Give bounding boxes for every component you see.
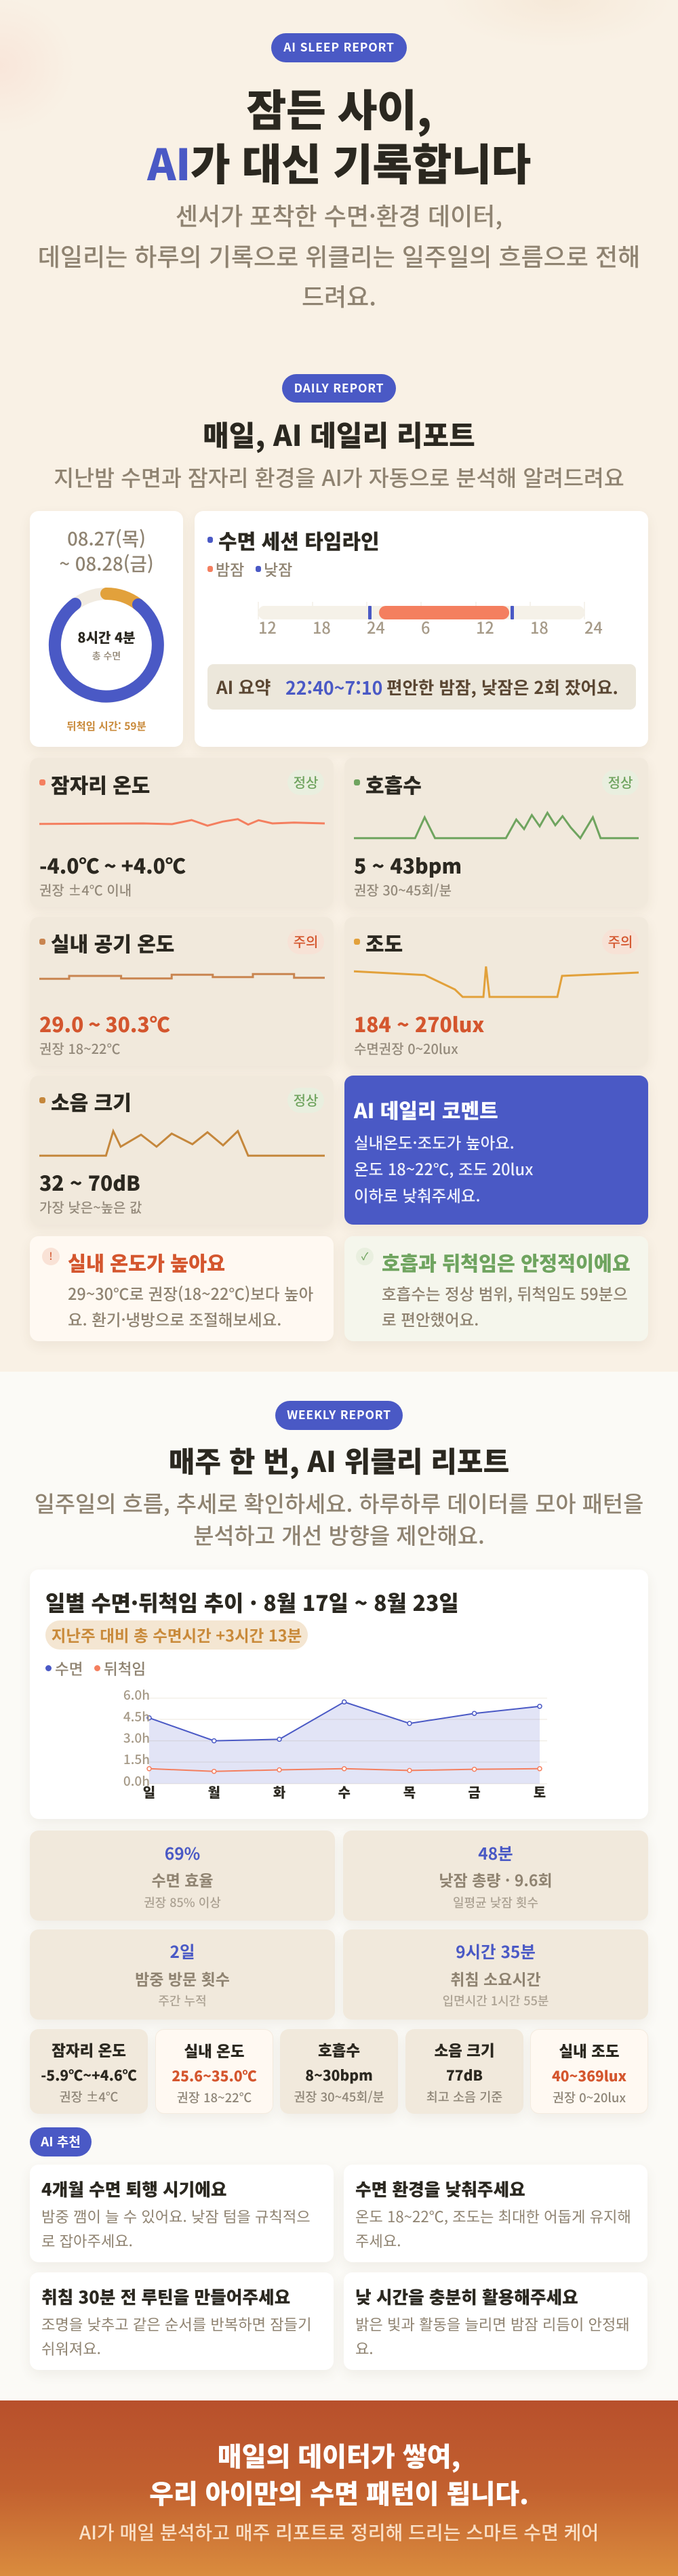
status chip — [287, 929, 324, 954]
badge: daily report: DAILY REPORT — [294, 380, 384, 396]
footer title — [149, 2436, 529, 2512]
status chip — [287, 1088, 324, 1113]
stat card: time to fall asleep: 9시간 35분 — [456, 1940, 536, 1963]
stat card: night visits — [30, 1929, 335, 2020]
summary: respiration: 호흡수 — [318, 2039, 360, 2061]
comment text: 이하로 낮춰주세요. — [354, 1183, 481, 1206]
subtitle: 드려요. — [302, 278, 376, 313]
summary: indoor temperature: 25.6~35.0℃ — [172, 2066, 257, 2086]
line chart: 4.5h — [123, 1707, 150, 1725]
summary: bed temperature: 권장 ±4℃ — [60, 2088, 118, 2106]
timeline chart: 12 — [258, 615, 277, 638]
stat card: time to fall asleep: 취침 소요시간 — [450, 1967, 541, 1990]
line chart: 금 — [468, 1782, 481, 1801]
legend: 낮잠 — [264, 557, 292, 580]
status chip: 주의 — [608, 931, 633, 951]
line chart: 월 — [207, 1782, 220, 1801]
status chip: 정상 — [294, 1090, 318, 1109]
callout body: 요. 환기·냉방으로 조절해보세요. — [68, 1307, 281, 1330]
date range: 08.27(목) — [67, 524, 146, 551]
recommendation: lower environment — [344, 2165, 647, 2262]
status chip: 정상 — [294, 772, 318, 792]
donut chart — [49, 588, 164, 703]
stat card: total naps: 일평균 낮잠 횟수 — [453, 1894, 538, 1911]
timeline chart: 24 — [367, 615, 385, 638]
stat card: sleep efficiency — [30, 1831, 335, 1921]
title: 잠든 사이, — [246, 77, 432, 139]
callout title: 실내 온도가 높아요 — [68, 1248, 225, 1277]
card title: 소음 크기 — [51, 1086, 132, 1116]
weekly report description: 분석하고 개선 방향을 제안해요. — [193, 1518, 485, 1551]
callout: room temperature high — [30, 1236, 334, 1341]
summary: indoor illuminance: 실내 조도 — [559, 2040, 620, 2062]
icon: check — [356, 1248, 374, 1265]
recommendation: sleep regression: 4개월 수면 퇴행 시기에요 — [41, 2176, 227, 2201]
sparkline — [39, 1128, 325, 1157]
badge: weekly report: WEEKLY REPORT — [287, 1406, 391, 1423]
legend — [45, 1658, 146, 1679]
heading: daily report: 매일, AI 데일리 리포트 — [203, 413, 475, 455]
AI summary — [207, 664, 636, 710]
recommendation: bedtime routine: 쉬워져요. — [41, 2337, 101, 2359]
sparkline — [39, 973, 325, 980]
subtitle: 센서가 포착한 수면·환경 데이터, — [176, 197, 502, 232]
footer title: 매일의 데이터가 쌓여, — [218, 2436, 460, 2474]
panel: daily sleep trend chart — [30, 1570, 648, 1819]
stat card: night visits: 밤중 방문 횟수 — [135, 1967, 230, 1990]
line chart: 3.0h — [123, 1728, 150, 1747]
stat card: sleep efficiency: 수면 효율 — [151, 1868, 214, 1891]
panel: respiration — [344, 758, 648, 907]
line chart: 토 — [534, 1782, 546, 1801]
status chip — [287, 770, 324, 795]
subtitle: 데일리는 하루의 기록으로 위클리는 일주일의 흐름으로 전해 — [38, 237, 640, 272]
card title: 호흡수 — [365, 769, 422, 799]
summary: indoor temperature: 권장 18~22℃ — [177, 2089, 252, 2106]
heading: weekly report: 매주 한 번, AI 위클리 리포트 — [169, 1439, 509, 1481]
line chart — [123, 1688, 547, 1801]
callout body: 29~30℃로 권장(18~22℃)보다 높아 — [68, 1282, 313, 1305]
marker — [354, 779, 360, 785]
icon: check: ✓ — [361, 1249, 368, 1263]
panel: footer — [0, 2400, 678, 2576]
summary: noise — [405, 2029, 523, 2114]
line chart: 화 — [273, 1782, 285, 1801]
recommendation: daytime: 밝은 빛과 활동을 늘리면 밤잠 리듬이 안정돼 — [355, 2313, 630, 2335]
card title: 실내 공기 온도 — [51, 928, 174, 958]
stat card: night visits: 2일 — [170, 1940, 195, 1963]
card title: 조도 — [365, 928, 403, 958]
panel: indoor air temperature — [30, 917, 334, 1066]
callout body: 호흡수는 정상 범위, 뒤척임도 59분으 — [382, 1282, 628, 1305]
timeline chart: 24 — [584, 615, 603, 638]
recommendation: lower environment: 온도 18~22℃, 조도는 최대한 어둡게 유지해 — [355, 2205, 631, 2227]
summary: indoor illuminance: 권장 0~20lux — [553, 2089, 626, 2106]
donut chart: 총 수면 — [92, 649, 121, 663]
recommendation: daytime: 낮 시간을 충분히 활용해주세요 — [355, 2284, 578, 2309]
panel: AI daily comment — [344, 1076, 648, 1225]
sparkline — [39, 818, 325, 827]
legend: 밤잠 — [216, 557, 244, 580]
recommendation: bedtime routine: 취침 30분 전 루틴을 만들어주세요 — [41, 2284, 290, 2309]
line chart: 0.0h — [123, 1772, 150, 1790]
summary: indoor illuminance — [530, 2029, 648, 2114]
comment text: 온도 18~22℃, 조도 20lux — [354, 1157, 533, 1180]
recommendation: 권장 18~22℃ — [39, 1038, 120, 1058]
footer subtitle: AI가 매일 분석하고 매주 리포트로 정리해 드리는 스마트 수면 케어 — [79, 2518, 599, 2546]
recommendation: 권장 30~45회/분 — [354, 880, 452, 899]
marker — [39, 1097, 45, 1103]
summary: bed temperature: -5.9℃~+4.6℃ — [41, 2065, 137, 2085]
panel: noise level — [30, 1076, 334, 1225]
icon: warning — [42, 1248, 60, 1265]
summary: noise: 77dB — [446, 2065, 483, 2085]
recommendation: sleep regression: 밤중 깸이 늘 수 있어요. 낮잠 텀을 규칙적으 — [41, 2205, 311, 2227]
callout body — [68, 1282, 313, 1330]
AI summary: 22:40~7:10 — [285, 674, 382, 700]
badge: weekly report — [275, 1401, 403, 1430]
recommendation: daytime: 요. — [355, 2337, 374, 2359]
weekly report description: 일주일의 흐름, 추세로 확인하세요. 하루하루 데이터를 모아 패턴을 — [35, 1487, 643, 1519]
panel: total sleep donut card — [30, 511, 183, 747]
status chip: 주의 — [294, 931, 318, 951]
title: AI가 대신 기록합니다 — [147, 131, 531, 193]
comment text — [354, 1130, 533, 1206]
summary: bed temperature — [30, 2029, 148, 2114]
donut chart: 8시간 4분 — [77, 627, 136, 647]
panel: weekly section background — [0, 1372, 678, 2400]
timeline title: 수면 세션 타임라인 — [218, 525, 380, 555]
timeline chart: 6 — [421, 615, 430, 638]
status chip — [602, 770, 639, 795]
marker — [354, 939, 360, 945]
recommendation: daytime — [344, 2272, 647, 2370]
timeline chart: 18 — [530, 615, 549, 638]
line chart: 목 — [403, 1782, 416, 1801]
recommendation: lower environment: 수면 환경을 낮춰주세요 — [355, 2176, 525, 2201]
date range: ~ 08.28(금) — [59, 549, 154, 576]
summary: bed temperature: 잠자리 온도 — [52, 2039, 126, 2061]
value: 5 ~ 43bpm — [354, 850, 462, 880]
summary: respiration: 8~30bpm — [305, 2065, 373, 2085]
line chart: 수 — [338, 1782, 351, 1801]
marker — [39, 779, 45, 785]
badge: AI sleep report: AI SLEEP REPORT — [283, 39, 395, 56]
panel: sleep session timeline — [195, 511, 648, 747]
badge: AI recommendation — [30, 2127, 92, 2156]
summary: indoor temperature — [155, 2029, 273, 2114]
toss and turn time: 뒤척임 시간: 59분 — [66, 718, 146, 733]
stat card: time to fall asleep: 입면시간 1시간 55분 — [443, 1992, 549, 2009]
recommendation: sleep regression — [30, 2165, 334, 2262]
comment text: 실내온도·조도가 높아요. — [354, 1130, 515, 1153]
legend: 뒤척임 — [104, 1658, 146, 1679]
panel: hero background — [0, 0, 678, 339]
recommendation: lower environment: 주세요. — [355, 2230, 401, 2251]
recommendation: 수면권장 0~20lux — [354, 1038, 458, 1058]
panel: illuminance — [344, 917, 648, 1066]
value: -4.0℃ ~ +4.0℃ — [39, 850, 186, 880]
summary: noise: 최고 소음 기준 — [426, 2088, 502, 2106]
stat card: total naps — [343, 1831, 648, 1921]
sparkline — [354, 811, 639, 840]
line chart: 1.5h — [123, 1750, 150, 1768]
callout title: 호흡과 뒤척임은 안정적이에요 — [382, 1248, 631, 1277]
status chip: 정상 — [608, 772, 633, 792]
AI summary: 편안한 밤잠, 낮잠은 2회 잤어요. — [386, 674, 618, 699]
recommendation: sleep regression: 로 잡아주세요. — [41, 2230, 133, 2251]
summary: respiration: 권장 30~45회/분 — [294, 2088, 384, 2106]
stat card: sleep efficiency: 69% — [165, 1841, 200, 1865]
comment title: AI 데일리 코멘트 — [354, 1095, 498, 1124]
comparison pill: 지난주 대비 총 수면시간 +3시간 13분 — [52, 1623, 302, 1646]
subtitle — [38, 197, 640, 313]
icon: warning: ! — [49, 1249, 53, 1263]
stat card: night visits: 주간 누적 — [158, 1992, 207, 2009]
stat card: sleep efficiency: 권장 85% 이상 — [144, 1894, 221, 1911]
timeline chart: 12 — [476, 615, 494, 638]
recommendation: 권장 ±4℃ 이내 — [39, 880, 132, 899]
summary: noise: 소음 크기 — [434, 2039, 495, 2061]
footer title: 우리 아이만의 수면 패턴이 됩니다. — [149, 2474, 529, 2512]
status chip — [602, 929, 639, 954]
line chart: 일 — [143, 1782, 155, 1801]
stat card: total naps: 낮잠 총량 · 9.6회 — [439, 1868, 553, 1891]
card title: 잠자리 온도 — [51, 769, 150, 799]
value: 184 ~ 270lux — [354, 1008, 484, 1038]
sparkline — [354, 966, 639, 998]
summary: respiration — [280, 2029, 398, 2114]
recommendation: bedtime routine — [30, 2272, 334, 2370]
callout body: 로 편안했어요. — [382, 1307, 479, 1330]
weekly report description — [35, 1487, 643, 1551]
AI summary: AI 요약 — [216, 674, 271, 699]
timeline chart: 18 — [313, 615, 331, 638]
recommendation: bedtime routine: 조명을 낮추고 같은 순서를 반복하면 잠들기 — [41, 2313, 312, 2335]
stat card: time to fall asleep — [343, 1929, 648, 2020]
badge: AI sleep report — [271, 33, 407, 62]
chart title: 일별 수면·뒤척임 추이 · 8월 17일 ~ 8월 23일 — [45, 1587, 459, 1618]
date range — [59, 524, 154, 576]
value: 29.0 ~ 30.3℃ — [39, 1008, 170, 1038]
callout: breathing stable — [344, 1236, 648, 1341]
daily report description: 지난밤 수면과 잠자리 환경을 AI가 자동으로 분석해 알려드려요 — [54, 461, 624, 493]
panel: bed temperature — [30, 758, 334, 907]
badge: AI recommendation: AI 추천 — [41, 2132, 81, 2150]
recommendation: 가장 낮은~높은 값 — [39, 1197, 142, 1217]
summary: indoor temperature: 실내 온도 — [184, 2040, 245, 2062]
marker — [39, 939, 45, 945]
callout body — [382, 1282, 628, 1330]
timeline chart — [258, 602, 603, 638]
summary: indoor illuminance: 40~369lux — [552, 2066, 626, 2086]
value: 32 ~ 70dB — [39, 1167, 140, 1197]
badge: daily report — [282, 374, 396, 403]
legend — [207, 557, 292, 580]
stat card: total naps: 48분 — [478, 1841, 513, 1865]
legend: 수면 — [55, 1658, 83, 1679]
title — [146, 77, 531, 193]
